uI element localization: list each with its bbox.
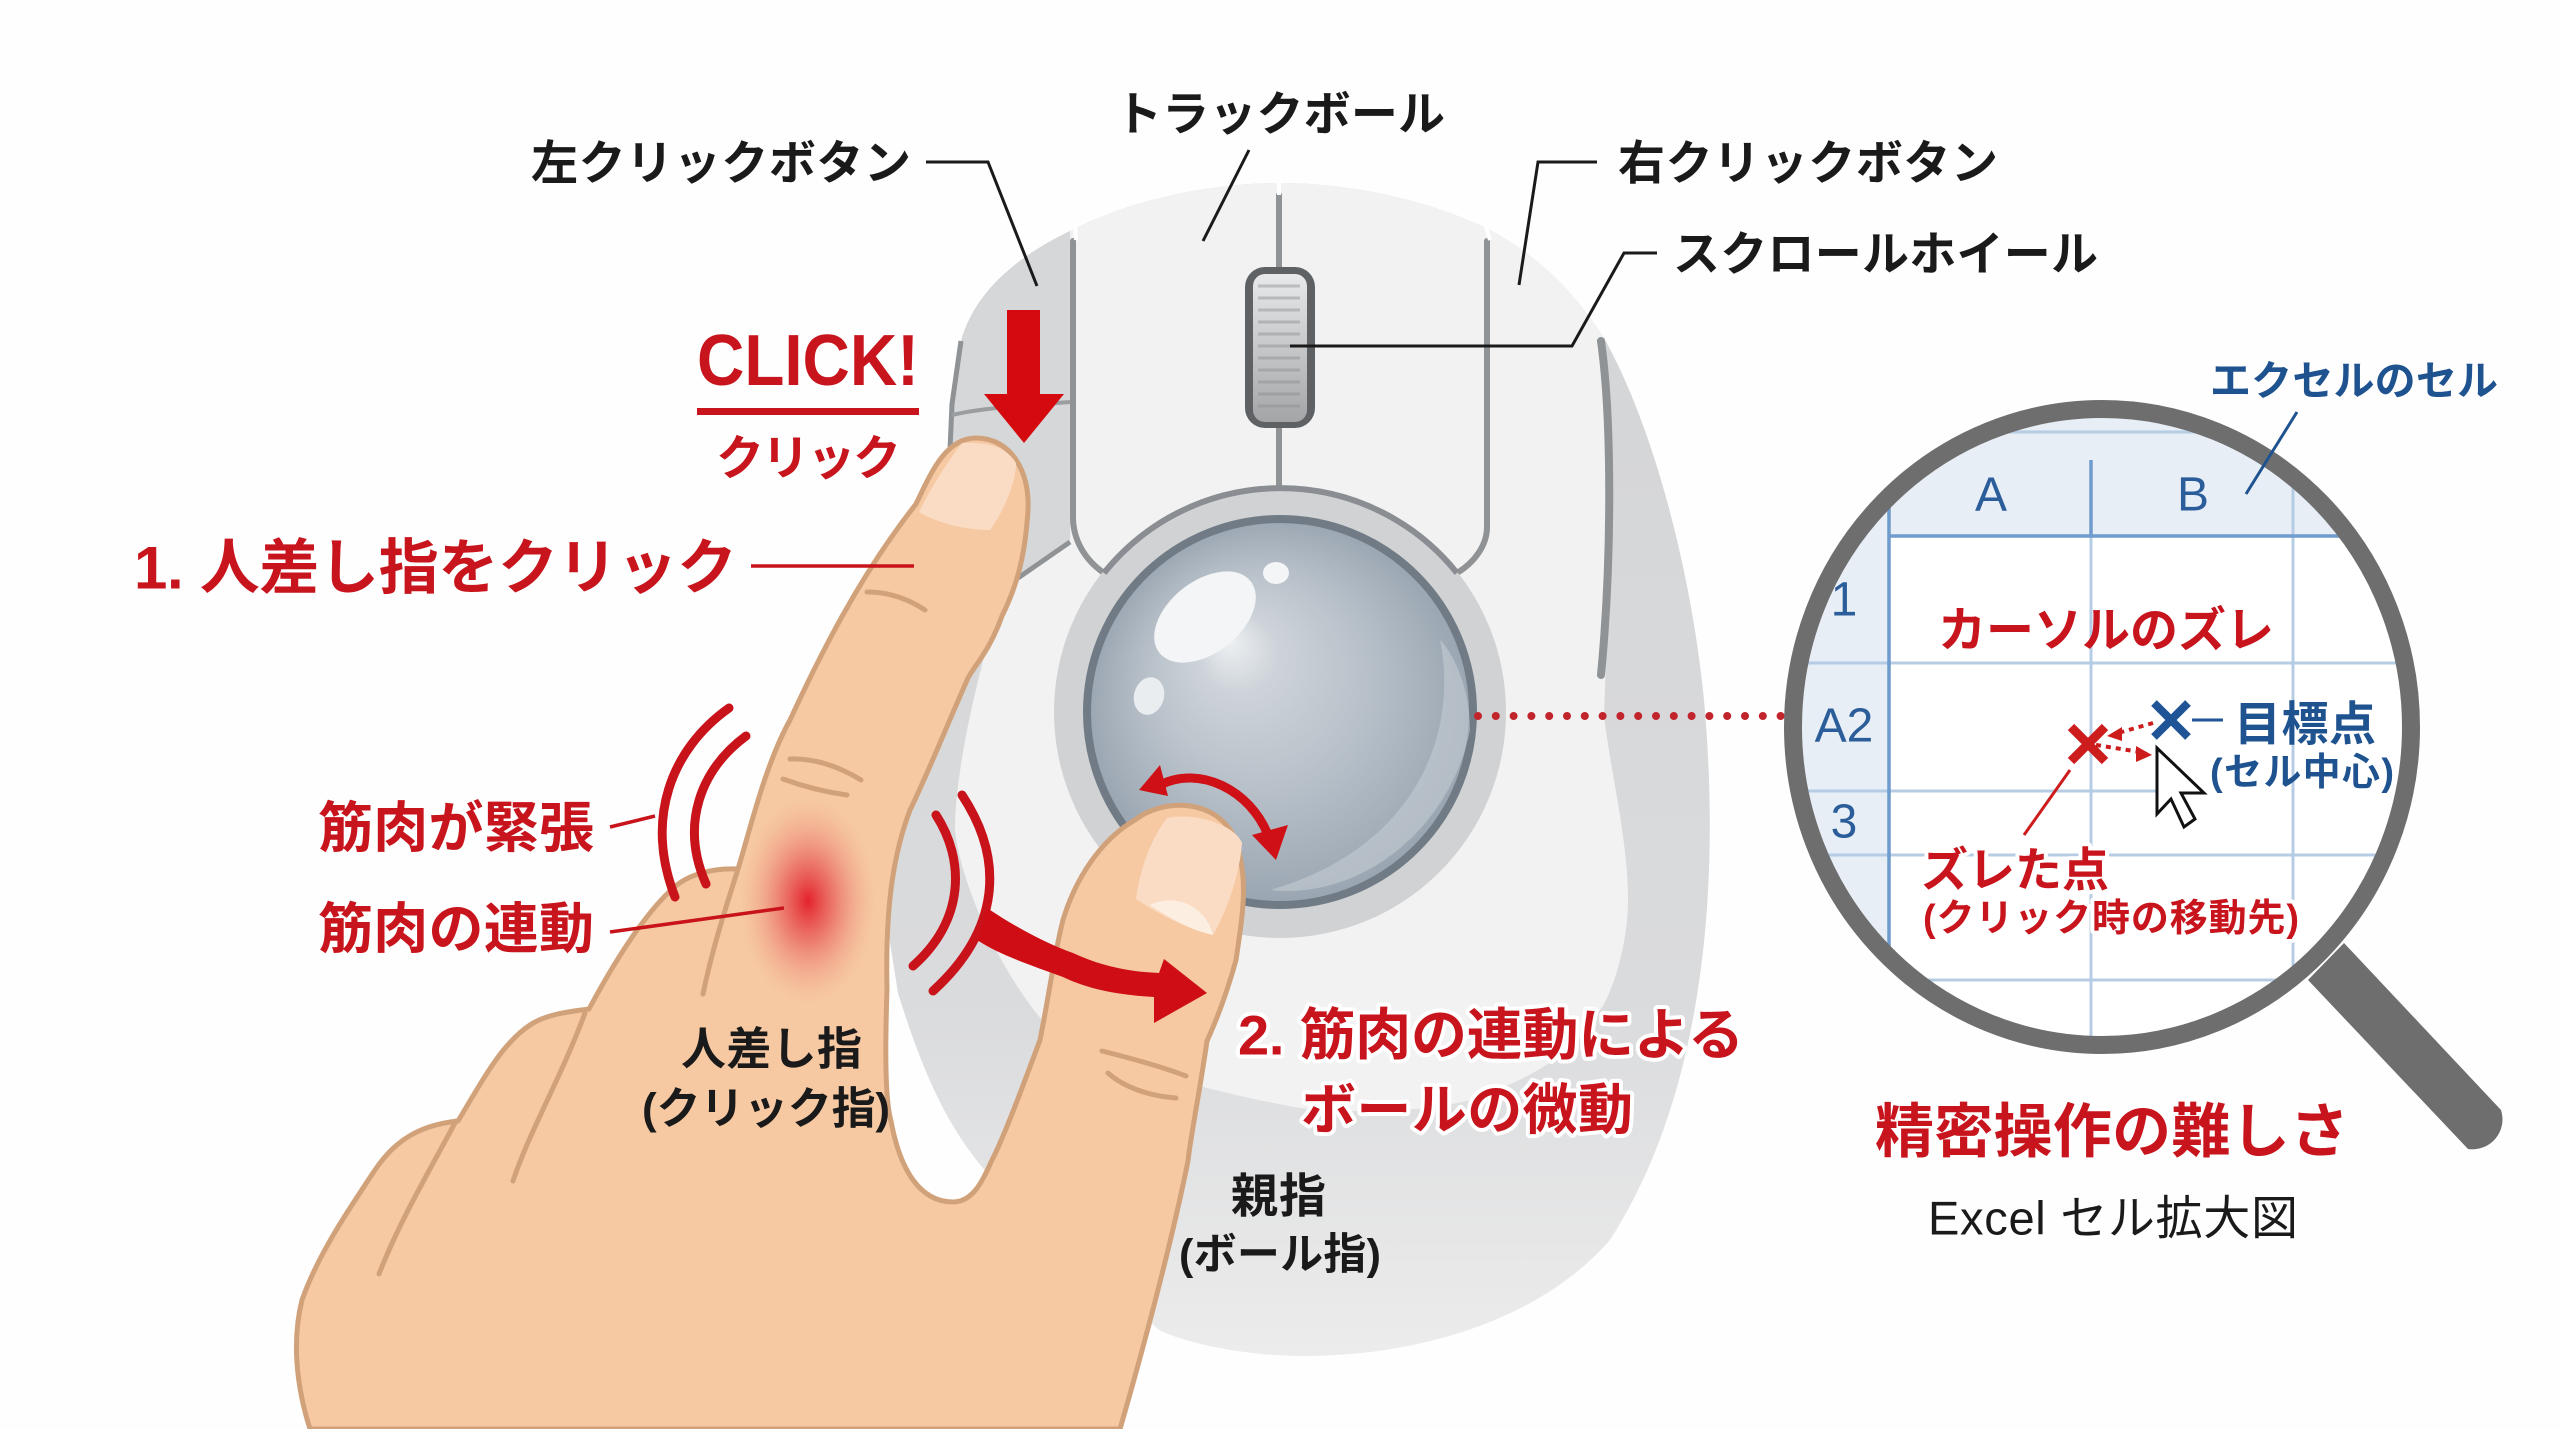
magnifier handle xyxy=(2308,943,2502,1149)
column and row headers: 1 xyxy=(1831,574,1857,626)
label: cursor drift: カーソルのズレ xyxy=(1938,604,2274,658)
muscle strain glow xyxy=(740,797,876,1005)
thumb fingernail xyxy=(1136,817,1242,935)
column and row headers xyxy=(1815,468,2209,848)
trackball ring xyxy=(1054,486,1506,938)
button seams xyxy=(1073,195,1609,675)
dotted connector xyxy=(1478,712,1782,720)
step 2 label: ボールの微動 xyxy=(1301,1079,1633,1141)
label: thumb xyxy=(1179,1170,1381,1279)
label: right click button: 右クリックボタン xyxy=(1618,136,1998,190)
mouse body xyxy=(888,180,1710,1356)
heading: precision difficulty: 精密操作の難しさ xyxy=(1875,1099,2349,1165)
label: index finger xyxy=(642,1024,890,1134)
label: Excel cell: エクセルのセル xyxy=(2210,358,2498,404)
step 1 label: 1. 人差し指をクリック xyxy=(134,534,737,602)
label: thumb: (ボール指) xyxy=(1179,1231,1381,1279)
red leader lines xyxy=(610,566,914,932)
target point: 目標点 xyxy=(2234,698,2376,750)
label: muscle tension: 筋肉が緊張 xyxy=(318,797,594,859)
mouse cursor xyxy=(2157,748,2204,827)
drifted point: (クリック時の移動先) xyxy=(1923,898,2299,940)
caption: Excel cell zoom: Excel セル拡大図 xyxy=(1928,1192,2298,1244)
tension waves xyxy=(662,708,990,991)
target point: (セル中心) xyxy=(2210,752,2394,794)
click callout: CLICK! xyxy=(697,321,919,401)
label: Excel cell xyxy=(2210,358,2498,494)
click callout xyxy=(697,321,919,486)
label: trackball: トラックボール xyxy=(1115,88,1445,140)
click arrow xyxy=(984,310,1064,443)
step 2 label: 2. 筋肉の連動による xyxy=(1238,1004,1744,1066)
label: muscle linkage: 筋肉の連動 xyxy=(318,898,594,960)
column and row headers: A2 xyxy=(1815,700,1873,752)
drift arrows xyxy=(2096,723,2153,762)
thumb lunula xyxy=(1150,900,1213,935)
label: index finger: (クリック指) xyxy=(642,1084,890,1134)
magnifier: Excel grid xyxy=(1802,418,2396,1036)
magnifier ring xyxy=(1793,409,2411,1045)
column and row headers: A xyxy=(1975,468,2007,522)
target point xyxy=(2154,698,2394,794)
trackball xyxy=(1087,519,1473,905)
finger creases xyxy=(379,592,1186,1274)
label: scroll wheel: スクロールホイール xyxy=(1673,228,2098,280)
hand xyxy=(296,438,1244,1429)
label: left click button: 左クリックボタン xyxy=(531,136,911,190)
rotation arrow xyxy=(1139,765,1288,860)
drifted point: ズレた点 xyxy=(1921,844,2109,896)
column and row headers: 3 xyxy=(1831,796,1857,848)
top gaps between buttons xyxy=(1075,180,1490,240)
click callout: クリック xyxy=(716,432,901,486)
scroll wheel xyxy=(1245,267,1315,428)
leader lines xyxy=(926,150,1657,346)
label: index finger: 人差し指 xyxy=(681,1024,862,1074)
index fingernail xyxy=(919,443,1016,530)
left click button xyxy=(949,231,1073,590)
drifted point xyxy=(1921,727,2299,940)
column and row headers: B xyxy=(2177,468,2209,522)
label: thumb: 親指 xyxy=(1231,1170,1326,1222)
step 2 label xyxy=(1238,1004,1744,1141)
movement arrow xyxy=(977,908,1207,1023)
